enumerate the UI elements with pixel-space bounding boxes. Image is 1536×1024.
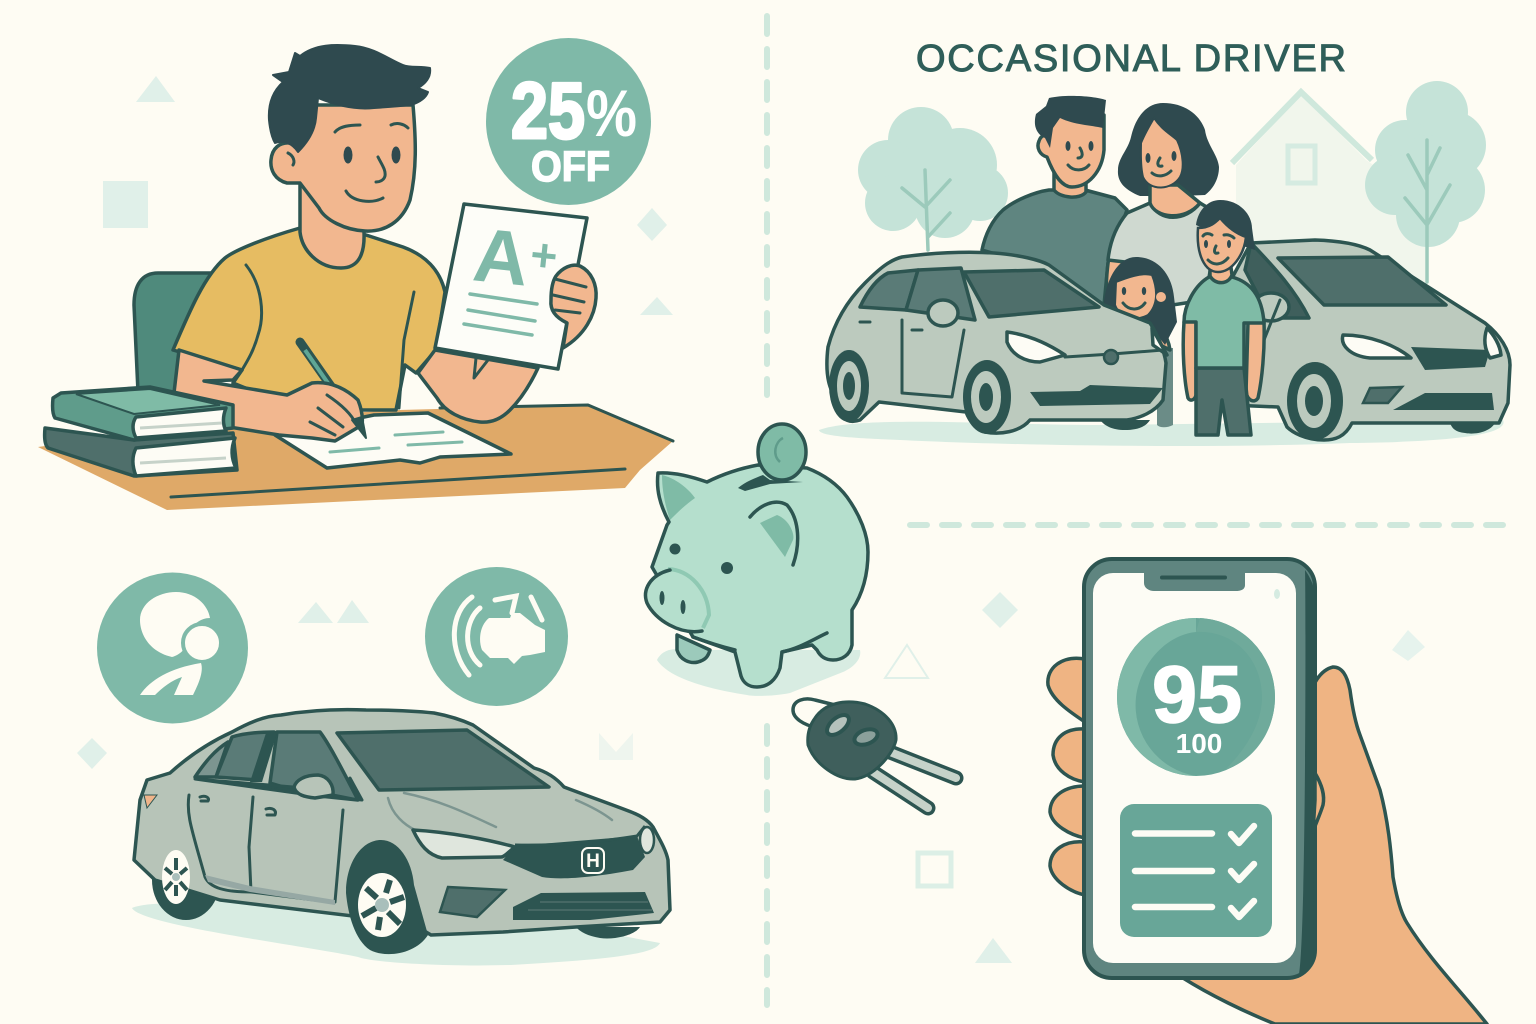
chair bbox=[134, 273, 212, 400]
vents bbox=[440, 887, 505, 917]
daughter bbox=[1104, 257, 1177, 427]
left car bbox=[827, 252, 1167, 434]
face details bbox=[288, 124, 408, 201]
car: sedan bbox=[132, 710, 670, 965]
hood lines bbox=[388, 793, 612, 830]
title: OCCASIONAL DRIVER bbox=[916, 38, 1346, 80]
car keys bbox=[793, 699, 956, 808]
logo bbox=[582, 848, 604, 873]
headlight bbox=[413, 830, 515, 858]
badge: 25% off bbox=[486, 38, 651, 205]
son bbox=[1183, 200, 1264, 435]
logo: H bbox=[586, 851, 600, 872]
eyes bbox=[670, 544, 680, 554]
right car bbox=[1220, 240, 1510, 440]
hair bbox=[269, 45, 430, 152]
head bbox=[271, 105, 415, 231]
icon: engine diagnostics bbox=[425, 567, 568, 706]
shadow bbox=[657, 649, 860, 696]
grille bbox=[503, 836, 645, 878]
panel: student good grades bbox=[38, 45, 673, 510]
icon: driver safety bbox=[97, 572, 248, 724]
taillight bbox=[144, 795, 157, 808]
body bbox=[134, 710, 670, 935]
rear wheel bbox=[152, 840, 220, 920]
badge: 25% off: % bbox=[586, 76, 637, 150]
piggy bank bbox=[646, 424, 868, 696]
panel: phone telematics score bbox=[1048, 559, 1487, 1024]
writing fingers bbox=[310, 395, 356, 435]
notch bbox=[1144, 573, 1245, 591]
fingers bbox=[1048, 658, 1085, 895]
panel: occasional driver family bbox=[819, 38, 1510, 446]
body bbox=[652, 465, 868, 687]
tree left bbox=[858, 107, 1008, 250]
door lines bbox=[188, 795, 343, 902]
pencil bbox=[300, 342, 342, 402]
report card: A bbox=[470, 212, 533, 303]
books bbox=[45, 387, 237, 476]
score gauge: 100 bbox=[1176, 728, 1222, 759]
windows bbox=[195, 742, 228, 777]
snout bbox=[647, 570, 709, 633]
neck bbox=[300, 180, 364, 268]
report card: + bbox=[528, 228, 560, 282]
house bbox=[1232, 92, 1425, 285]
checklist card bbox=[1120, 804, 1272, 937]
torso bbox=[173, 228, 445, 410]
tree right bbox=[1365, 81, 1486, 282]
body ear bbox=[760, 515, 793, 557]
mirror bbox=[294, 775, 333, 798]
notebook bbox=[275, 413, 511, 468]
background shapes bbox=[77, 76, 1425, 963]
father bbox=[982, 96, 1127, 305]
score gauge bbox=[1117, 618, 1275, 776]
report card bbox=[435, 204, 587, 369]
shadow bbox=[132, 900, 660, 965]
desk bbox=[38, 405, 673, 510]
section dividers bbox=[767, 16, 1506, 1005]
arm writing bbox=[172, 350, 362, 441]
arm holding paper bbox=[418, 350, 538, 422]
ground shadow bbox=[819, 420, 1504, 446]
coin bbox=[758, 424, 806, 480]
wheel arch and front wheel bbox=[346, 840, 428, 954]
screen bbox=[1093, 573, 1296, 963]
far legs bbox=[677, 635, 710, 662]
phone body bbox=[1084, 559, 1315, 978]
mother bbox=[1106, 103, 1220, 310]
pencil tip bbox=[352, 417, 366, 438]
score gauge: 95 bbox=[1152, 650, 1242, 740]
badge: 25% off: OFF bbox=[531, 143, 610, 191]
slot bbox=[738, 475, 803, 491]
badge: 25% off: 25 bbox=[511, 66, 585, 155]
inner ear bbox=[662, 475, 695, 520]
hand bbox=[1183, 667, 1487, 1024]
underside bbox=[576, 927, 640, 938]
hand holding card bbox=[551, 265, 596, 348]
